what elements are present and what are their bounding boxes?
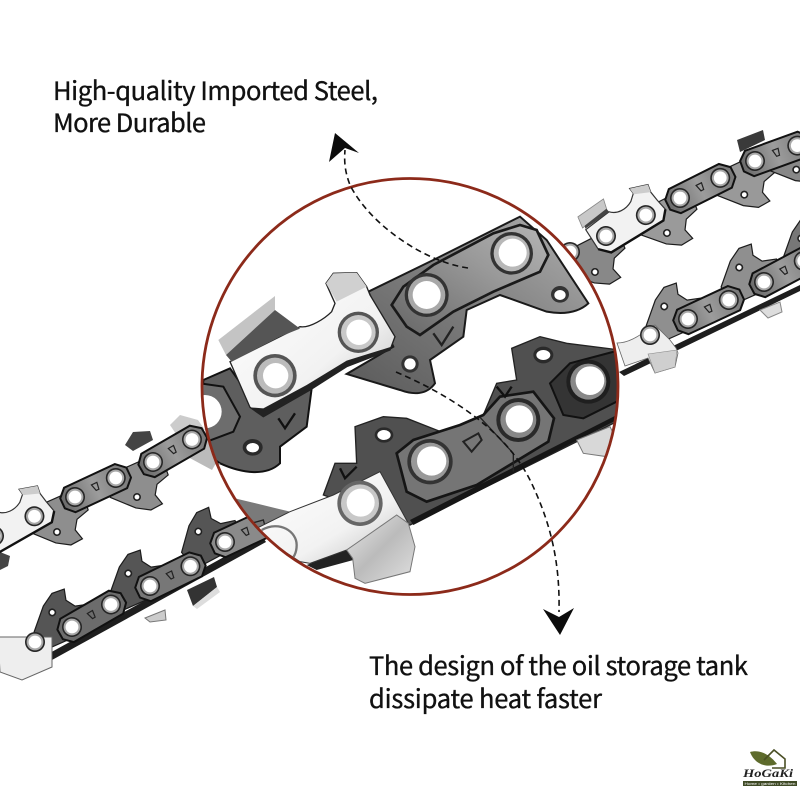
white cutter link — [617, 325, 678, 373]
magnified lower chain — [200, 337, 620, 583]
lower chain: left section — [0, 498, 284, 680]
upper chain: left section — [0, 415, 225, 570]
heading: steel: More Durable — [53, 103, 206, 140]
upper chain: right section — [559, 124, 800, 299]
logo: HoGaKi — [742, 750, 797, 786]
arrow: steel callout — [329, 133, 468, 268]
logo: HoGaKi: Home • garden • Kitchen — [744, 781, 796, 786]
magnified chain — [188, 217, 620, 583]
arrow: oil tank callout — [396, 372, 574, 635]
logo: HoGaKi: HoGaKi — [742, 768, 794, 780]
heading: oil tank: dissipate heat faster — [369, 679, 602, 716]
magnifier circle fill — [202, 178, 618, 594]
magnifier circle outline — [202, 178, 618, 594]
pins — [405, 273, 449, 317]
heading: oil tank: The design of the oil storage tank — [369, 646, 748, 683]
lower chain: right section — [617, 206, 800, 376]
heading: steel: High-quality Imported Steel, — [53, 71, 378, 108]
magnified upper chain — [188, 217, 588, 472]
